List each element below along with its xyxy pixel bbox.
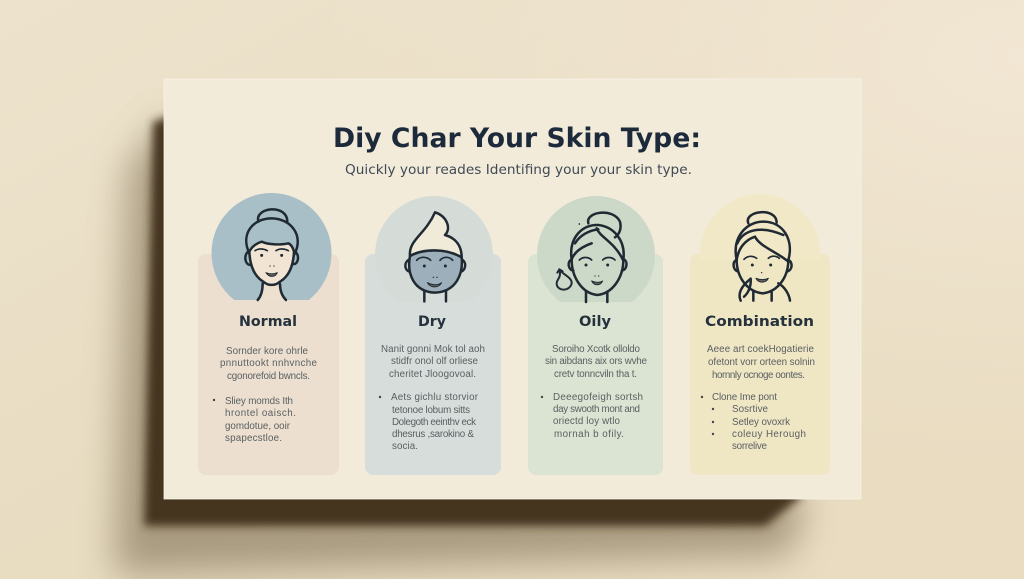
icon: oily skin face: [537, 196, 655, 314]
card: oily: [528, 254, 663, 475]
bullets: dry: [379, 392, 479, 452]
title: Diy Char Your Skin Type:: [333, 123, 701, 154]
bullets: combination: sorrelive: [732, 441, 768, 452]
panel: combination: [690, 194, 830, 475]
bullets: normal: hrontel oaisch.: [225, 408, 296, 419]
icon: combination skin face: [700, 194, 820, 301]
bullets: oily: oriectd loy wtlo: [553, 416, 621, 427]
bullets: normal: Sliey momds Ith: [225, 396, 293, 407]
bullets: combination: Sosrtive: [732, 404, 769, 415]
heading: oily: Oily: [579, 314, 612, 330]
description: combination: hornnly ocnoge oontes.: [712, 370, 805, 381]
bullets: dry: Dolegoth eeinthv eck: [392, 417, 476, 428]
bullets: dry: tetonoe lobum sitts: [392, 405, 470, 416]
card: combination: [690, 254, 830, 475]
description: normal: [220, 346, 318, 382]
bullets: oily: day swooth mont and: [553, 404, 640, 415]
description: normal: cgonorefoid bwncls.: [227, 371, 310, 382]
bullets: combination: [701, 392, 806, 452]
bullets: normal: [213, 396, 296, 444]
description: normal: Sornder kore ohrle: [226, 346, 309, 357]
description: oily: sin aibdans aix ors wvhe: [545, 356, 648, 367]
paper panel: [164, 79, 861, 499]
card: dry: [365, 254, 501, 475]
description: oily: Soroiho Xcotk olloldo: [552, 344, 641, 355]
description: dry: stidfr onol olf orliese: [391, 356, 479, 367]
icon: normal skin face: [212, 193, 332, 313]
bullets: oily: [541, 392, 643, 440]
panel: oily: [528, 196, 663, 475]
panel: normal: [198, 193, 339, 475]
description: dry: Nanit gonni Mok tol aoh: [381, 344, 485, 355]
description: normal: pnnuttookt nnhvnche: [220, 358, 318, 369]
paper drop shadow: [115, 115, 805, 575]
heading: dry: Dry: [418, 314, 447, 330]
bullets: normal: gomdotue, ooir: [225, 421, 291, 432]
heading: combination: Combination: [705, 314, 814, 330]
description: dry: cheritet Jloogovoal.: [389, 369, 476, 380]
bullets: oily: mornah b ofily.: [554, 429, 624, 440]
bullets: combination: Clone Ime pont: [712, 392, 777, 403]
subtitle: Quickly your reades Identifing your your skin type.: [345, 162, 692, 178]
description: combination: Aeee art coekHogatierie: [707, 344, 815, 355]
description: oily: cretv tonncviln tha t.: [554, 369, 637, 380]
description: oily: [545, 344, 648, 380]
bullets: dry: Aets gichlu storvior: [391, 392, 479, 403]
bullets: oily: Deeegofeigh sortsh: [553, 392, 643, 403]
description: combination: ofetont vorr orteen solnin: [708, 357, 815, 368]
bullets: normal: spapecstloe.: [225, 433, 282, 444]
card: normal: [198, 254, 339, 475]
bullets: combination: coleuy Herough: [732, 429, 806, 440]
description: dry: [381, 344, 485, 380]
bullets: dry: socia.: [392, 441, 418, 452]
panel: dry: [365, 196, 501, 475]
icon: dry skin face: [375, 196, 493, 314]
heading: normal: Normal: [239, 314, 297, 330]
bullets: combination: Setley ovoxrk: [732, 417, 790, 428]
bullets: dry: dhesrus ,sarokino &: [392, 429, 474, 440]
description: combination: [707, 344, 815, 381]
